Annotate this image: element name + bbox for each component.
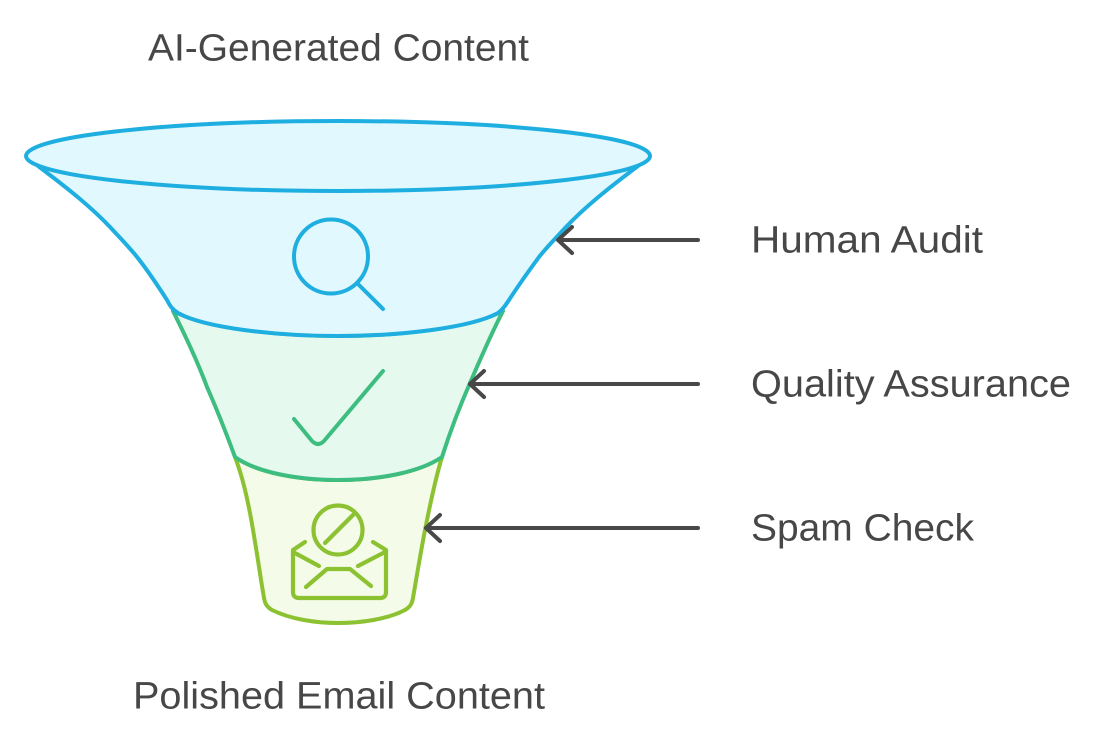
- label: Quality Assurance: Quality Assurance: [751, 364, 1071, 406]
- panel: spam check funnel section: [235, 457, 442, 623]
- arrow: human audit: [558, 227, 698, 253]
- panel: human audit funnel section: [38, 166, 638, 336]
- icon: check mark: [294, 371, 383, 444]
- funnel top opening: [26, 121, 650, 191]
- arrow: quality assurance: [470, 371, 698, 397]
- label: Human Audit: Human Audit: [751, 220, 983, 262]
- icon: blocked envelope: [293, 506, 386, 598]
- arrow: spam check: [426, 515, 698, 541]
- caption: Polished Email Content: Polished Email Content: [133, 676, 545, 718]
- title: AI-Generated Content: AI-Generated Content: [148, 28, 529, 70]
- label: Spam Check: Spam Check: [751, 508, 975, 550]
- icon: magnifying glass: [294, 220, 383, 309]
- panel: quality assurance funnel section: [173, 311, 503, 480]
